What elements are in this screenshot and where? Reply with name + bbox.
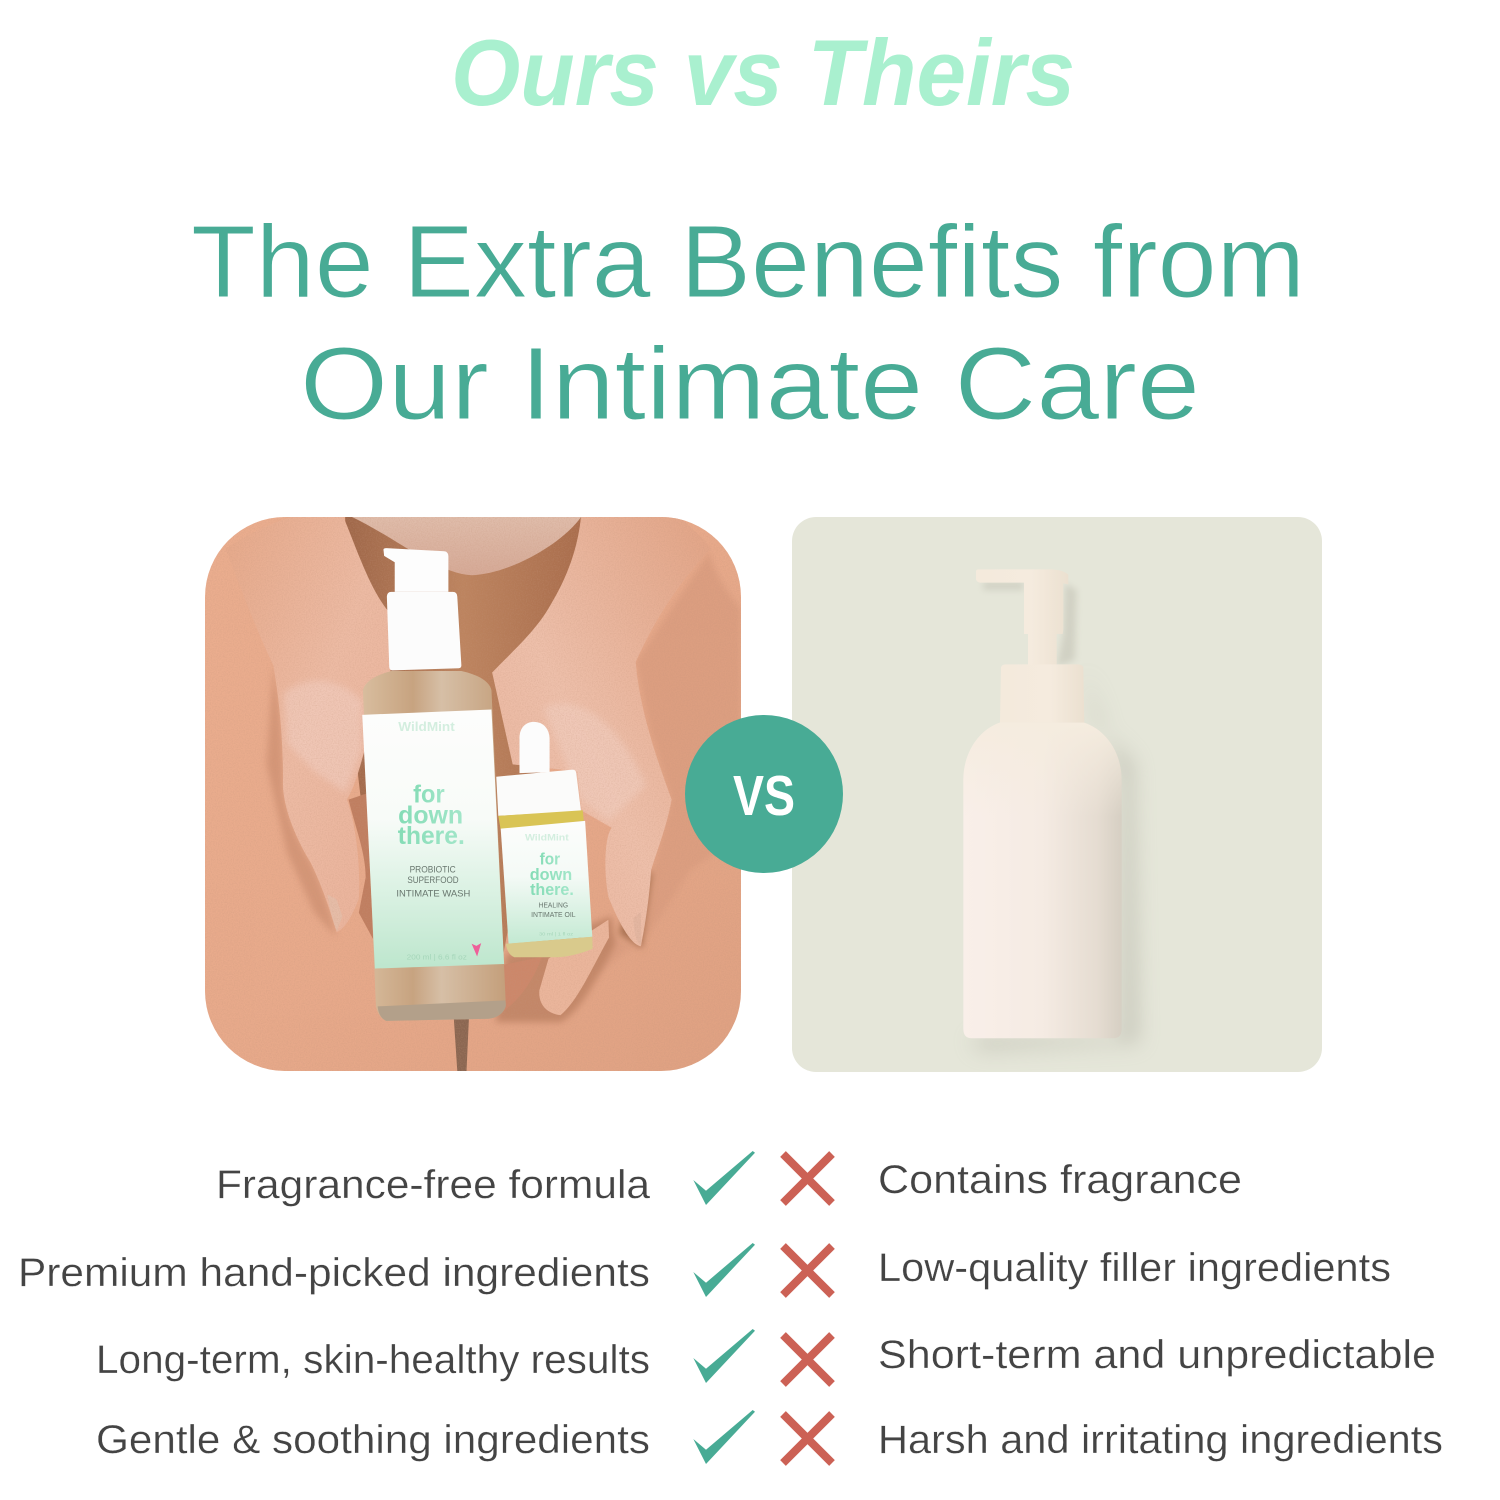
badge: VS: VS xyxy=(733,764,795,828)
shadow under the fingers xyxy=(496,916,615,1022)
heading: The Extra Benefits from Our Intimate Care: The Extra Benefits from xyxy=(191,204,1305,319)
list: their drawbacks: Low-quality filler ingredients xyxy=(878,1246,1391,1290)
shadow beside right fingers xyxy=(619,870,653,948)
title: Ours vs Theirs: Ours vs Theirs xyxy=(451,20,1075,125)
dropper bottle: there. xyxy=(530,880,574,899)
skin grain xyxy=(205,517,741,1071)
panel: product photo (ours) xyxy=(205,517,741,1071)
wash bottle: there. xyxy=(398,822,465,850)
dropper bottle: WildMint xyxy=(525,832,569,842)
dropper bottle xyxy=(496,722,593,957)
wash bottle: INTIMATE WASH xyxy=(396,888,470,898)
list: our benefits: Premium hand-picked ingredients xyxy=(18,1251,650,1295)
logo heart xyxy=(472,943,481,957)
dropper bottle: 30 ml | 1 fl oz xyxy=(539,931,574,937)
heading: The Extra Benefits from Our Intimate Care: Our Intimate Care xyxy=(300,326,1200,441)
bottle shadow xyxy=(970,670,1138,1050)
list: their drawbacks: Short-term and unpredictable xyxy=(878,1333,1436,1377)
mini label xyxy=(501,821,592,944)
right hand xyxy=(492,517,684,946)
shaded right thigh xyxy=(638,559,738,904)
label xyxy=(362,710,504,969)
pump head xyxy=(976,569,1068,665)
bottle body xyxy=(963,723,1122,1038)
left fingernail xyxy=(328,895,342,930)
dropper bottle: INTIMATE OIL xyxy=(531,910,576,919)
wash bottle: 200 ml | 6.6 fl oz xyxy=(407,952,467,961)
dark gap between the thighs xyxy=(345,517,581,976)
wash bottle: SUPERFOOD xyxy=(407,875,459,885)
pump shadow xyxy=(983,582,1077,667)
bottle collar xyxy=(1000,664,1084,723)
pump collar xyxy=(387,592,461,670)
wash bottle: PROBIOTIC xyxy=(410,864,456,874)
heading: The Extra Benefits from Our Intimate Care xyxy=(191,204,1305,441)
wash bottle: for xyxy=(413,780,445,809)
list: their drawbacks: Harsh and irritating ingredients xyxy=(878,1418,1443,1462)
pump nozzle xyxy=(383,548,448,592)
finger below the dropper bottle xyxy=(539,920,609,1015)
wash bottle: down xyxy=(398,801,463,829)
glass base xyxy=(506,937,593,957)
lower finger behind left hand xyxy=(348,794,373,938)
oil band xyxy=(498,810,584,830)
list: their drawbacks xyxy=(878,1158,1443,1462)
dropper cap xyxy=(496,770,581,816)
badge: VS xyxy=(685,715,843,873)
list: their drawbacks: Contains fragrance xyxy=(878,1158,1242,1202)
dropper bottle: down xyxy=(530,865,572,884)
right palm highlight xyxy=(543,704,646,821)
list: our benefits: Fragrance-free formula xyxy=(216,1163,651,1207)
bottle shoulder tint xyxy=(963,723,1122,817)
dropper bottle: for xyxy=(540,849,561,869)
icons: red crosses xyxy=(783,1154,832,1463)
belly / underwear area xyxy=(352,517,581,575)
list: our benefits: Long-term, skin-healthy results xyxy=(96,1338,650,1382)
bottle base glass xyxy=(378,1000,506,1021)
dropper bottle: HEALING xyxy=(539,900,568,909)
bottle body xyxy=(363,671,506,1021)
wash bottle xyxy=(362,548,506,1021)
dropper bulb xyxy=(519,722,550,773)
right fingernail xyxy=(633,912,641,945)
left hand xyxy=(258,517,390,932)
icons: green checks xyxy=(693,1151,755,1464)
finger behind the wash bottle xyxy=(504,958,541,1010)
left palm highlight xyxy=(284,681,362,793)
wash bottle: WildMint xyxy=(398,720,456,734)
list: our benefits xyxy=(18,1163,651,1462)
panel: generic bottle (theirs) xyxy=(792,517,1322,1072)
left hand shadow xyxy=(267,665,337,937)
list: our benefits: Gentle & soothing ingredients xyxy=(96,1418,650,1462)
centre crease xyxy=(454,1019,469,1071)
